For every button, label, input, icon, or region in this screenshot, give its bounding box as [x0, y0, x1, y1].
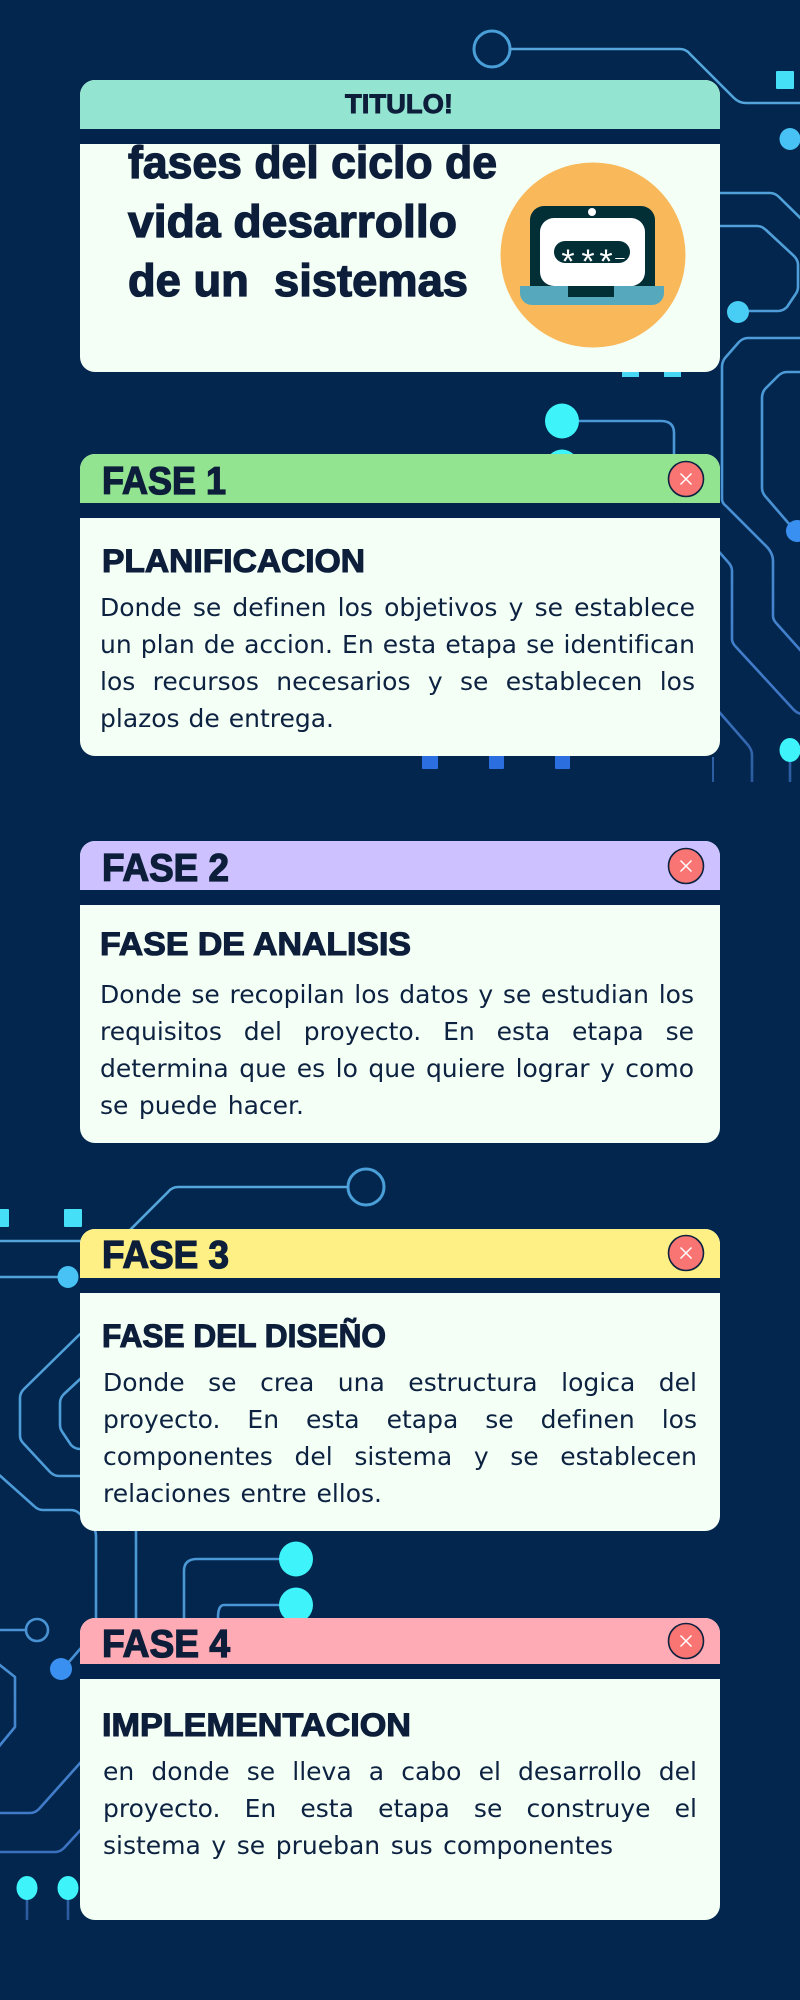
fase 3 description: componentes del sistema y se establecen — [103, 1442, 697, 1471]
fase 3 description: Donde se crea una estructura logica del — [103, 1368, 697, 1397]
title card divider band — [80, 129, 720, 144]
fase 2 header — [80, 841, 720, 890]
heading: IMPLEMENTACION: IMPLEMENTACION — [102, 1707, 411, 1743]
heading: TITULO!: TITULO! — [345, 89, 453, 119]
fase 4 divider band — [80, 1664, 720, 1679]
fase 3 description: proyecto. En esta etapa se definen los — [103, 1405, 697, 1434]
heading: FASE DE ANALISIS: FASE DE ANALISIS — [100, 926, 411, 962]
fase 3 description: relaciones entre ellos. — [103, 1479, 382, 1508]
fase 3 header — [80, 1229, 720, 1278]
icon: laptop with password: * — [561, 243, 575, 281]
icon: close button — [668, 1622, 704, 1660]
heading: FASE 2: FASE 2 — [102, 847, 229, 890]
fase 4 header — [80, 1618, 720, 1664]
panel: fase 4 — [80, 1618, 720, 1920]
fase 2 description — [100, 980, 694, 1120]
fase 4 description: proyecto. En esta etapa se construye el — [103, 1794, 697, 1823]
panel: fase 1 — [80, 454, 720, 756]
fase 3 divider band — [80, 1278, 720, 1293]
heading: FASE DEL DISEÑO: FASE DEL DISEÑO — [102, 1318, 386, 1354]
icon: laptop with password: * — [581, 243, 595, 281]
main title: de un sistemas — [128, 255, 468, 306]
main title: fases del ciclo de — [128, 137, 497, 188]
title card header — [80, 80, 720, 129]
fase 2 description: requisitos del proyecto. En esta etapa se — [100, 1017, 694, 1046]
main title: vida desarrollo — [128, 196, 457, 247]
fase 1 divider band — [80, 503, 720, 518]
icon: laptop with password: _ — [615, 243, 626, 260]
fase 4 description: sistema y se prueban sus componentes — [103, 1831, 613, 1860]
fase 1 description: un plan de accion. En esta etapa se identifican — [100, 630, 695, 659]
icon: close button — [668, 848, 704, 884]
fase 2 description: se puede hacer. — [100, 1091, 304, 1120]
fase 1 description: Donde se definen los objetivos y se establece — [100, 593, 695, 622]
main title — [127, 137, 497, 306]
fase 3 description — [103, 1368, 697, 1508]
fase 2 description: Donde se recopilan los datos y se estudian los — [100, 980, 694, 1009]
fase 1 description: los recursos necesarios y se establecen los — [100, 667, 695, 696]
icon: laptop with password — [500, 162, 686, 348]
heading: PLANIFICACION: PLANIFICACION — [102, 543, 365, 579]
fase 1 header — [80, 454, 720, 503]
panel: title card — [80, 80, 720, 372]
icon: close button — [668, 1234, 704, 1272]
fase 4 description: en donde se lleva a cabo el desarrollo del — [103, 1757, 697, 1786]
heading: FASE 3: FASE 3 — [102, 1234, 229, 1277]
heading: FASE 1: FASE 1 — [102, 460, 226, 503]
icon: close button — [668, 460, 704, 498]
fase 1 description — [100, 593, 695, 733]
fase 1 description: plazos de entrega. — [100, 704, 334, 733]
icon: laptop with password: * — [599, 243, 613, 281]
fase 2 description: determina que es lo que quiere lograr y como — [100, 1054, 694, 1083]
panel: fase 2 — [80, 841, 720, 1143]
fase 2 divider band — [80, 890, 720, 905]
panel: fase 3 — [80, 1229, 720, 1531]
fase 4 description — [103, 1757, 697, 1860]
